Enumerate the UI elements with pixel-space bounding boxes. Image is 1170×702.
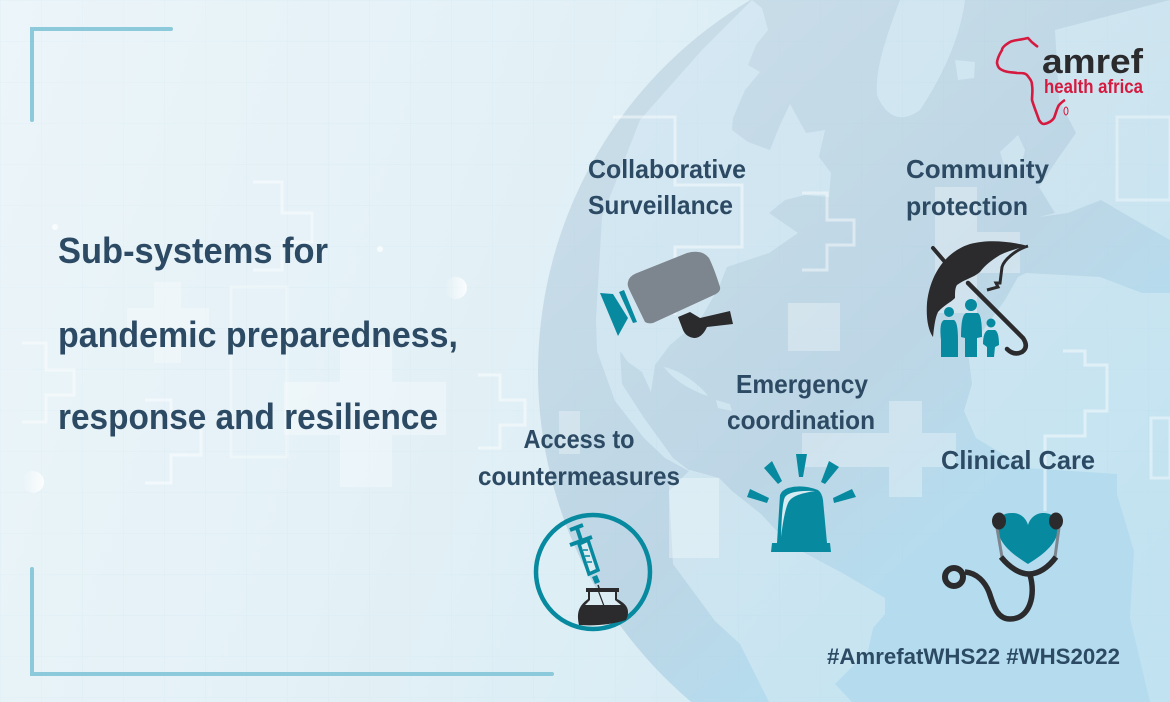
decorative plus outlines [22,117,1170,511]
logo: amref health africa [997,38,1144,124]
heading: collaborative surveillance [588,154,746,220]
heading: access to countermeasures: countermeasures [478,461,680,491]
decorative dots [22,224,467,493]
heading: collaborative surveillance: Collaborative [588,154,746,184]
icon: emergency siren [747,454,856,552]
heading: collaborative surveillance: Surveillance [588,190,733,220]
heading: community protection: Community [906,154,1050,184]
title: Sub-systems for [58,230,328,271]
logo: amref health africa: amref [1042,43,1144,81]
heading: access to countermeasures: Access to [524,424,634,454]
icon: security camera [600,252,733,338]
title: response and resilience [58,396,438,437]
left frame accent [32,29,552,674]
heading: access to countermeasures [478,424,680,491]
logo: amref health africa: health africa [1044,77,1143,98]
heading: emergency coordination: coordination [727,405,875,435]
hashtags: #AmrefatWHS22 #WHS2022 [827,644,1120,669]
heading: emergency coordination: Emergency [736,369,869,399]
globe with continents [538,0,1170,702]
heading: community protection: protection [906,191,1028,221]
decorative plus fills [127,187,1020,558]
heading: emergency coordination [727,369,875,435]
icon: stethoscope with heart [945,512,1063,619]
icon: umbrella and family [927,241,1028,357]
heading: community protection [906,154,1050,221]
title: pandemic preparedness, [58,314,458,355]
heading: clinical care: Clinical Care [941,445,1095,475]
icon: syringe and vial in circle [536,515,650,629]
title [58,230,458,437]
